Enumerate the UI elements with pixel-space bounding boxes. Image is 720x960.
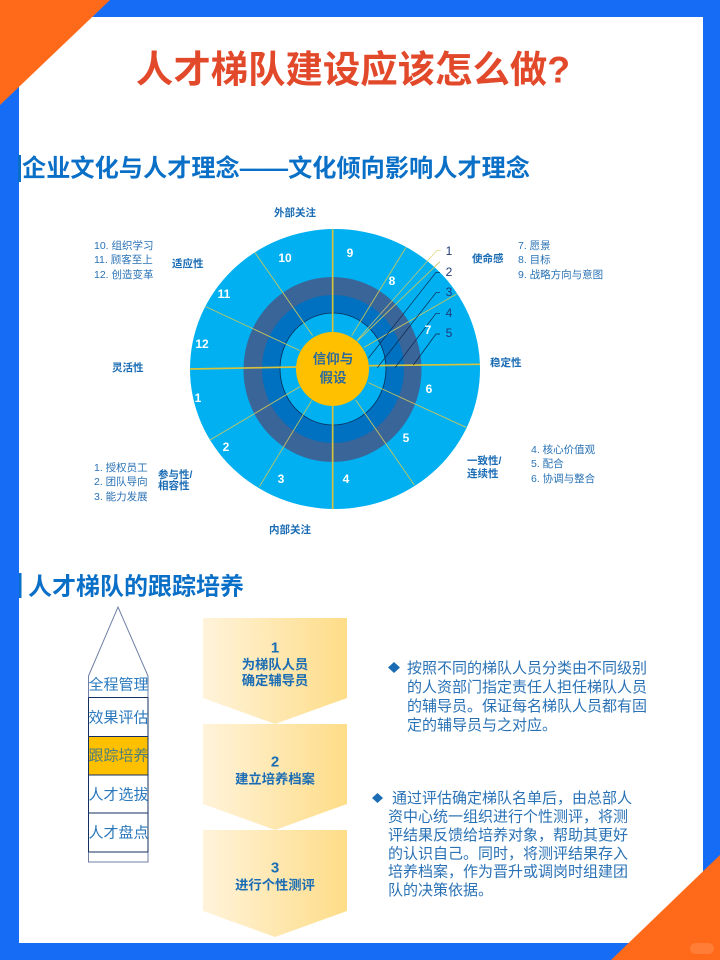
dimension labels: 灵活性 <box>112 361 144 374</box>
inner ring <box>280 313 386 425</box>
step 3 chevron: 3 <box>271 860 279 876</box>
step 2 chevron: 建立培养档案 <box>235 770 316 786</box>
note: consistency items <box>531 443 596 485</box>
note: adaptability items: 11. 顾客至上 <box>94 253 153 266</box>
text block: assign mentors: 定的辅导员与之对应。 <box>407 716 557 734</box>
note: consistency items: 5. 配合 <box>531 457 564 470</box>
sector numbers: 4 <box>343 472 350 486</box>
leader numbers: 2 <box>446 265 453 279</box>
sector numbers: 5 <box>403 431 410 445</box>
heading: culture and talent: 企业文化与人才理念——文化倾向影响人才理念 <box>22 154 530 182</box>
title: 人才梯队建设应该怎么做? <box>136 48 570 90</box>
note: consistency items: 4. 核心价值观 <box>531 443 596 456</box>
stage labels: 跟踪培养 <box>88 748 149 764</box>
step 1 chevron: 确定辅导员 <box>242 672 308 688</box>
leader numbers: 3 <box>446 285 453 299</box>
note: mission items: 8. 目标 <box>518 254 551 266</box>
text block: assessment: 队的决策依据。 <box>388 882 493 899</box>
sector numbers: 8 <box>389 274 396 288</box>
note: involvement items <box>94 461 148 503</box>
dimension labels: 相容性 <box>158 479 190 492</box>
sector numbers: 9 <box>347 246 354 260</box>
core circle: beliefs and assumptions: 假设 <box>320 370 347 386</box>
text block: assessment: 培养档案，作为晋升或调岗时组建团 <box>388 862 628 880</box>
step 3 chevron: 进行个性测评 <box>235 876 315 892</box>
core circle: beliefs and assumptions <box>296 332 369 406</box>
sector numbers: 10 <box>278 251 292 265</box>
sector numbers: 6 <box>426 382 433 396</box>
note: mission items: 9. 战略方向与意图 <box>518 268 603 281</box>
note: involvement items: 3. 能力发展 <box>94 490 148 503</box>
note: mission items <box>518 240 603 281</box>
step 2 chevron: 2 <box>271 754 279 770</box>
chart: culture radial diagram <box>94 206 603 536</box>
note: adaptability items: 12. 创造变革 <box>94 268 154 281</box>
stage labels: 全程管理 <box>88 676 149 694</box>
stage labels: 人才盘点 <box>88 824 149 842</box>
bullet <box>388 662 400 673</box>
text block: assessment <box>372 790 632 899</box>
leader numbers <box>446 244 453 340</box>
dimension labels: 外部关注 <box>274 206 316 219</box>
text block: assessment: 的认识自己。同时，将测评结果存入 <box>388 846 628 862</box>
bullet <box>372 793 383 803</box>
text block: assessment: 通过评估确定梯队名单后，由总部人 <box>392 790 632 807</box>
corner: bottom-right orange triangle <box>611 855 720 960</box>
text block: assign mentors: 的人资部门指定责任人担任梯队人员 <box>407 679 647 696</box>
sector numbers: 7 <box>425 323 432 337</box>
leader lines <box>357 251 441 368</box>
core circle: beliefs and assumptions: 信仰与 <box>313 350 353 366</box>
dark ring <box>244 277 422 462</box>
leader numbers: 5 <box>446 326 453 340</box>
stage labels <box>88 676 149 842</box>
dimension labels: 内部关注 <box>269 523 311 536</box>
text block: assign mentors <box>388 660 647 734</box>
text block: assign mentors: 按照不同的梯队人员分类由不同级别 <box>407 660 647 677</box>
sector numbers <box>195 246 433 486</box>
step 1 chevron: 为梯队人员 <box>242 656 308 672</box>
sector numbers: 1 <box>195 391 202 405</box>
note: adaptability items <box>94 239 154 281</box>
sector numbers: 12 <box>195 337 209 351</box>
sector numbers: 3 <box>278 472 285 486</box>
outer ring <box>190 229 480 509</box>
step 2 chevron <box>203 724 347 830</box>
dimension labels: 使命感 <box>472 252 504 265</box>
text block: assessment: 评结果反馈给培养对象，帮助其更好 <box>388 827 628 844</box>
middle ring <box>262 295 404 443</box>
dimension labels: 稳定性 <box>490 356 522 369</box>
stage labels: 效果评估 <box>88 710 149 726</box>
sector numbers: 11 <box>218 287 231 301</box>
leader numbers: 4 <box>446 306 453 320</box>
stage: tracking highlight <box>88 736 148 775</box>
dimension labels: 连续性 <box>467 467 499 480</box>
dimension labels: 适应性 <box>172 257 204 270</box>
note: mission items: 7. 愿景 <box>518 240 551 252</box>
dimension labels: 一致性/ <box>467 454 501 467</box>
text block: assessment: 资中心统一组织进行个性测评，将测 <box>388 808 628 826</box>
leader numbers: 1 <box>446 244 453 258</box>
diagram: talent pipeline pencil <box>88 607 149 862</box>
corner: top-left orange triangle <box>0 0 110 105</box>
note: involvement items: 2. 团队导向 <box>94 475 148 488</box>
note: adaptability items: 10. 组织学习 <box>94 239 154 252</box>
step 1 chevron: 1 <box>271 640 279 656</box>
note: consistency items: 6. 协调与整合 <box>531 472 596 485</box>
text block: assign mentors: 的辅导员。保证每名梯队人员都有固 <box>407 698 647 715</box>
note: involvement items: 1. 授权员工 <box>94 461 148 474</box>
radial divider lines <box>190 229 480 509</box>
step 1 chevron <box>203 618 347 724</box>
stage labels: 人才选拔 <box>88 786 149 804</box>
dimension labels: 参与性/ <box>158 468 192 481</box>
heading: talent tracking: 人才梯队的跟踪培养 <box>28 574 244 600</box>
watermark pill <box>690 943 714 954</box>
step 3 chevron <box>203 830 347 937</box>
dimension labels <box>112 206 522 536</box>
sector numbers: 2 <box>223 440 230 454</box>
